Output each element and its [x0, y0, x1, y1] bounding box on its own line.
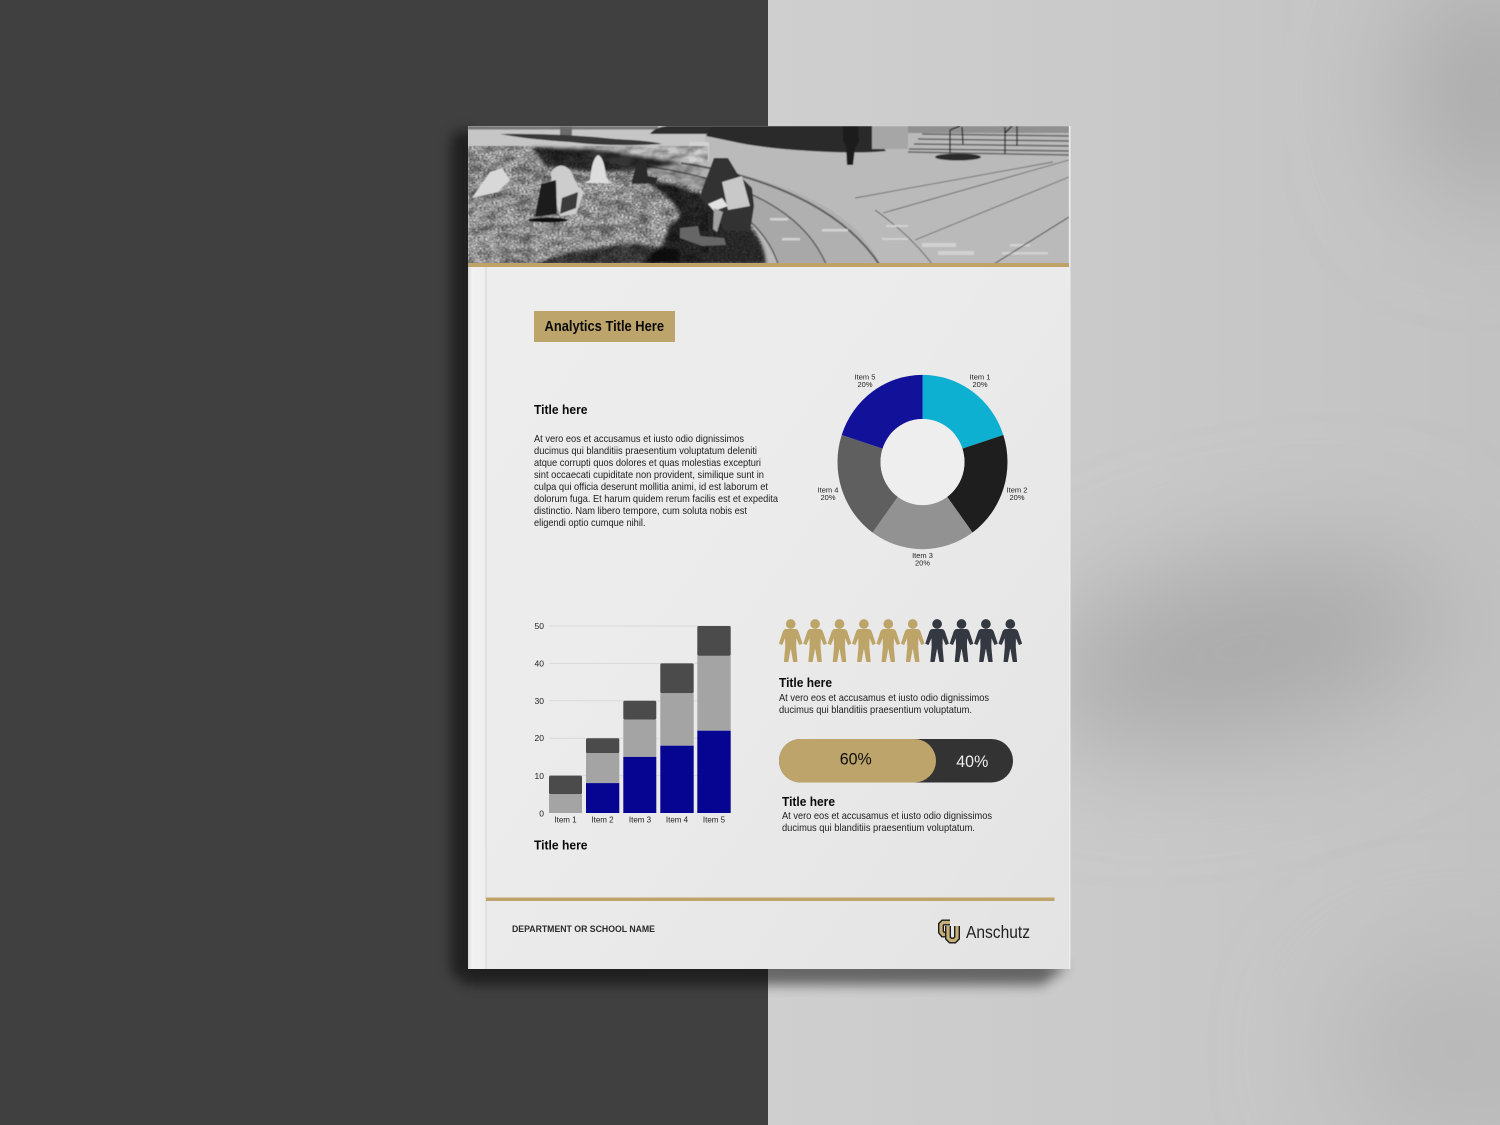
grass shadows [532, 147, 766, 264]
donut chart [818, 372, 1027, 568]
donut labels: 20% [972, 380, 988, 389]
text block: title and paragraph: distinctio. Nam libero tempore, cum soluta nobis est [534, 506, 747, 517]
y axis values: 40 [535, 658, 544, 668]
donut labels: 20% [1009, 493, 1025, 502]
handrails [950, 126, 1017, 154]
text block: title and paragraph: culpa qui officia deserunt mollitia animi, id est laborum et [534, 482, 768, 493]
bar: item 5 [697, 626, 731, 813]
donut labels: Item 3 [912, 551, 933, 560]
large seated group [700, 158, 754, 232]
y axis values: 10 [535, 771, 544, 781]
y axis values: 0 [539, 808, 544, 818]
book cover [468, 126, 1070, 969]
seated people [472, 155, 754, 246]
y axis values [535, 621, 544, 818]
bar chart title: Title here [534, 838, 588, 852]
pictogram: ten people, six gold and four dark [779, 620, 1022, 662]
plaza joint lines [855, 160, 1069, 264]
donut labels: Item 4 [818, 486, 838, 494]
progress pill: 60 / 40: 60% [840, 750, 872, 768]
bag on ground [680, 226, 726, 246]
building wall [872, 126, 908, 149]
text block: progress caption [782, 794, 992, 834]
text block: pictogram caption: At vero eos et accusamus et iusto odio dignissimos [779, 693, 989, 704]
book drop shadow [451, 128, 1068, 985]
text block: title and paragraph: Title here [534, 402, 588, 417]
bar: item 3 [623, 701, 656, 813]
far lawn shadow strip [500, 134, 662, 145]
small hedge [650, 126, 712, 134]
donut labels: Item 5 [855, 372, 875, 382]
person far left [472, 168, 510, 198]
text block: title and paragraph: ducimus qui blanditiis praesentium voluptatum deleniti [534, 446, 757, 457]
text block: progress caption: Title here [782, 794, 835, 809]
dappled shade [468, 146, 708, 264]
person in chair [551, 165, 584, 216]
stairs [908, 134, 1069, 155]
y axis values: 50 [535, 621, 544, 631]
text block: title and paragraph: eligendi optio cumque nihil. [534, 518, 646, 529]
department name: DEPARTMENT OR SCHOOL NAME [512, 924, 655, 935]
progress pill: 60 / 40 [779, 739, 1013, 782]
icon: CU monogram [941, 922, 957, 940]
background: dark left half [0, 0, 768, 1125]
manhole [935, 154, 981, 160]
text block: pictogram caption: ducimus qui blanditiis praesentium voluptatum. [779, 705, 972, 716]
donut labels: 20% [857, 380, 873, 389]
bar: item 1 [549, 776, 582, 813]
x axis labels: Item 5 [703, 816, 726, 824]
donut labels: Item 2 [1007, 486, 1027, 494]
text block: title and paragraph: sint occaecati cupiditate non provident, similique sunt in [534, 470, 764, 481]
stacked bar chart [535, 621, 731, 824]
x axis labels: Item 4 [666, 816, 689, 824]
y axis values: 30 [535, 696, 544, 706]
text block: pictogram caption [779, 675, 989, 716]
text block: progress caption: At vero eos et accusamus et iusto odio dignissimos [782, 811, 992, 822]
seated person three [632, 159, 658, 184]
far background strip [468, 126, 658, 130]
bar: item 2 [586, 738, 619, 813]
background: light grey right half [768, 0, 1500, 1125]
sunlight flecks on steps [770, 218, 1048, 255]
text block: title and paragraph: dolorum fuga. Et harum quidem rerum facilis est et expedita [534, 494, 778, 505]
x axis labels [554, 816, 726, 824]
spine strip [468, 126, 487, 969]
gold header rule [468, 263, 1069, 267]
gold footer rule [486, 898, 1054, 901]
gridlines [549, 626, 731, 776]
bar: item 4 [660, 663, 694, 813]
text block: title and paragraph: atque corrupti quos dolores et quas molestias excepturi [534, 458, 761, 469]
donut labels: Item 1 [970, 372, 990, 382]
text block: progress caption: ducimus qui blanditiis praesentium voluptatum. [782, 823, 975, 834]
text block: title and paragraph [534, 402, 778, 529]
column [689, 142, 709, 162]
x axis labels: Item 2 [591, 816, 614, 824]
seated person two [584, 155, 610, 183]
header photo [468, 126, 1069, 264]
title badge: Analytics Title Here [544, 319, 664, 335]
donut labels: 20% [820, 493, 836, 502]
x axis labels: Item 1 [554, 816, 577, 824]
curved steps [638, 165, 826, 263]
walking person [843, 126, 859, 165]
pavement [468, 126, 1069, 264]
x axis labels: Item 3 [629, 816, 652, 824]
grass [468, 146, 765, 264]
shadow under chair [528, 218, 568, 222]
text block: pictogram caption: Title here [779, 675, 832, 690]
donut labels [818, 372, 1027, 568]
logo: CU Anschutz: Anschutz [966, 922, 1030, 942]
y axis values: 20 [535, 733, 544, 743]
logo: CU Anschutz [941, 922, 1030, 942]
donut labels: 20% [915, 558, 930, 568]
large hedge [706, 126, 886, 152]
title badge [534, 311, 675, 342]
text block: title and paragraph: At vero eos et accusamus et iusto odio dignissimos [534, 434, 744, 445]
progress pill: 60 / 40: 40% [956, 752, 988, 771]
